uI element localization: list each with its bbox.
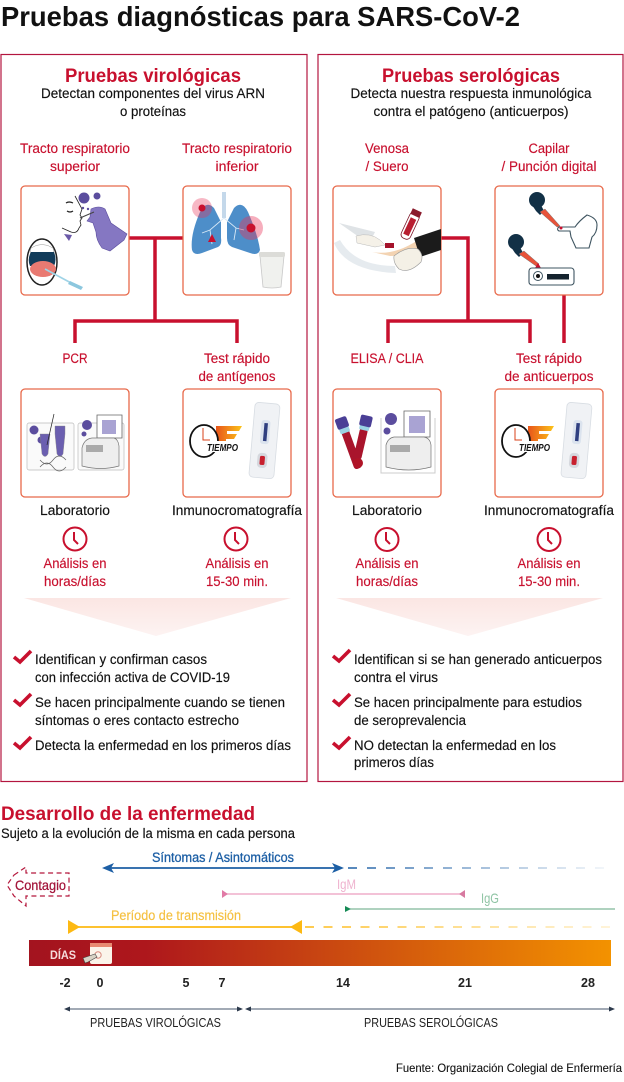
label: análisis en horas/días: horas/días bbox=[356, 574, 418, 589]
description: virológicas: o proteínas bbox=[120, 104, 186, 119]
list: virológicas: con infección activa de COVID-19 bbox=[35, 670, 230, 685]
icon box: nasal and mouth swab bbox=[21, 186, 129, 295]
heading: serológicas: Pruebas serológicas bbox=[382, 65, 560, 87]
label: análisis en 15-30 min: Análisis en bbox=[518, 556, 580, 571]
axis numbers: 14 bbox=[336, 976, 350, 990]
range: pruebas virológicas bbox=[64, 1006, 243, 1030]
description: virológicas: Detectan componentes del virus ARN bbox=[41, 86, 265, 101]
label: test rápido de antígenos: Test rápido bbox=[204, 351, 270, 366]
label: test rápido de antígenos bbox=[198, 351, 276, 384]
label: test rápido de anticuerpos bbox=[504, 351, 594, 384]
label: análisis en 15-30 min bbox=[518, 556, 580, 589]
label: laboratorio: Laboratorio bbox=[40, 503, 110, 518]
label: tracto respiratorio superior: Tracto respiratorio bbox=[20, 141, 130, 156]
list: serológicas: Se hacen principalmente para estudios bbox=[354, 695, 582, 710]
arrow: IgG bbox=[345, 890, 615, 912]
range: pruebas serológicas: PRUEBAS SEROLÓGICAS bbox=[364, 1015, 498, 1030]
heading: virológicas: Pruebas virológicas bbox=[65, 65, 241, 87]
label: capilar / punción digital bbox=[502, 141, 596, 174]
label: inmunocromatografía: Inmunocromatografía bbox=[172, 503, 302, 518]
label: días: DÍAS bbox=[50, 947, 76, 962]
list: serológicas: primeros días bbox=[354, 755, 434, 770]
label: venosa / suero: / Suero bbox=[366, 159, 408, 174]
heading: desarrollo de la enfermedad: Desarrollo de la enfermedad bbox=[1, 803, 255, 825]
label: laboratorio: Laboratorio bbox=[352, 503, 422, 518]
label: análisis en horas/días bbox=[356, 556, 418, 589]
description: serológicas: Detecta nuestra respuesta inmunológica bbox=[350, 86, 592, 101]
label: análisis en horas/días: horas/días bbox=[44, 574, 106, 589]
icon box: antigen rapid test bbox=[183, 389, 291, 497]
description: virológicas bbox=[41, 86, 265, 119]
label: tracto respiratorio inferior bbox=[182, 141, 292, 174]
panel: pruebas virológicas bbox=[1, 54, 307, 782]
title: Pruebas diagnósticas para SARS-CoV-2 bbox=[1, 1, 520, 32]
arrow: síntomas / asintomáticos bbox=[102, 850, 612, 873]
label: análisis en 15-30 min: 15-30 min. bbox=[518, 574, 580, 589]
arrow: período de transmisión: Período de transmisión bbox=[111, 908, 241, 923]
list: virológicas: Se hacen principalmente cuando se tienen bbox=[35, 695, 285, 710]
subheading: Sujeto a la evolución de la misma en cada persona bbox=[1, 826, 295, 841]
label: capilar / punción digital: / Punción digital bbox=[502, 159, 596, 174]
icon: clock bbox=[224, 528, 248, 550]
label: inmunocromatografía: Inmunocromatografía bbox=[484, 503, 614, 518]
list: serológicas: contra el virus bbox=[354, 670, 438, 685]
label: capilar / punción digital: Capilar bbox=[528, 141, 570, 156]
label: venosa / suero bbox=[365, 141, 409, 174]
label: PCR: PCR bbox=[62, 351, 88, 366]
icon box: capillary finger prick bbox=[495, 186, 603, 295]
label: venosa / suero: Venosa bbox=[365, 141, 409, 156]
label: tracto respiratorio inferior: Tracto respiratorio bbox=[182, 141, 292, 156]
icon box: ELISA laboratory bbox=[333, 389, 441, 497]
axis numbers: 0 bbox=[97, 976, 104, 990]
description: serológicas bbox=[350, 86, 592, 119]
list: virológicas: Identifican y confirman casos bbox=[35, 652, 207, 667]
icon box: PCR laboratory bbox=[21, 389, 129, 497]
panel: pruebas serológicas bbox=[318, 54, 623, 782]
list: virológicas: Detecta la enfermedad en los primeros días bbox=[35, 738, 291, 753]
list: serológicas: NO detectan la enfermedad en los bbox=[354, 738, 556, 753]
logo: tiempo: TIEMPO bbox=[519, 443, 550, 454]
axis numbers: 21 bbox=[458, 976, 472, 990]
list: virológicas bbox=[14, 651, 291, 753]
list: serológicas bbox=[333, 650, 602, 770]
label: contagio bbox=[7, 867, 69, 906]
icon: clock bbox=[64, 528, 86, 550]
icon box: venous blood draw bbox=[333, 186, 441, 295]
axis numbers: 5 bbox=[183, 976, 190, 990]
label: tracto respiratorio superior: superior bbox=[50, 159, 101, 174]
icon: clock bbox=[538, 528, 560, 551]
arrow: IgM: IgM bbox=[337, 877, 356, 892]
arrow: down summary bbox=[336, 598, 603, 636]
range: pruebas virológicas: PRUEBAS VIROLÓGICAS bbox=[90, 1015, 221, 1030]
label: análisis en horas/días bbox=[44, 556, 106, 589]
connector: serológicas bbox=[388, 238, 564, 343]
icon: calendar bbox=[83, 943, 112, 964]
label: análisis en 15-30 min bbox=[206, 556, 268, 589]
icon box: lungs and sample cup bbox=[183, 186, 291, 295]
label: tracto respiratorio superior bbox=[20, 141, 130, 174]
label: test rápido de antígenos: de antígenos bbox=[198, 369, 276, 384]
list: serológicas: de seroprevalencia bbox=[354, 713, 466, 728]
arrow: período de transmisión bbox=[68, 908, 615, 934]
label: test rápido de anticuerpos: Test rápido bbox=[516, 351, 582, 366]
timeline chart bbox=[7, 850, 615, 1030]
arrow: síntomas / asintomáticos: Síntomas / Asintomáticos bbox=[152, 850, 294, 865]
label: contagio: Contagio bbox=[15, 877, 66, 893]
label: ELISA / CLIA: ELISA / CLIA bbox=[350, 351, 424, 366]
label: test rápido de anticuerpos: de anticuerpos bbox=[504, 369, 594, 384]
axis numbers: -2 bbox=[59, 976, 71, 990]
list: serológicas: Identifican si se han generado anticuerpos bbox=[354, 652, 602, 667]
description: serológicas: contra el patógeno (anticuerpos) bbox=[374, 104, 568, 119]
icon: clock bbox=[376, 528, 398, 551]
bar: días bbox=[29, 940, 611, 966]
range: pruebas serológicas bbox=[245, 1006, 615, 1030]
icon box: antibody rapid test bbox=[495, 389, 603, 497]
label: análisis en horas/días: Análisis en bbox=[356, 556, 418, 571]
connector: virológicas bbox=[75, 238, 237, 343]
label: análisis en 15-30 min: Análisis en bbox=[206, 556, 268, 571]
axis numbers: 7 bbox=[219, 976, 226, 990]
arrow: IgG: IgG bbox=[481, 890, 499, 906]
arrow: down summary bbox=[24, 598, 291, 636]
axis numbers bbox=[59, 976, 595, 990]
logo: tiempo: TIEMPO bbox=[207, 443, 238, 454]
label: análisis en 15-30 min: 15-30 min. bbox=[206, 574, 268, 589]
axis numbers: 28 bbox=[581, 976, 595, 990]
label: análisis en horas/días: Análisis en bbox=[44, 556, 106, 571]
arrow: IgM bbox=[222, 877, 465, 898]
list: virológicas: síntomas o eres contacto estrecho bbox=[35, 713, 239, 728]
label: tracto respiratorio inferior: inferior bbox=[216, 159, 259, 174]
